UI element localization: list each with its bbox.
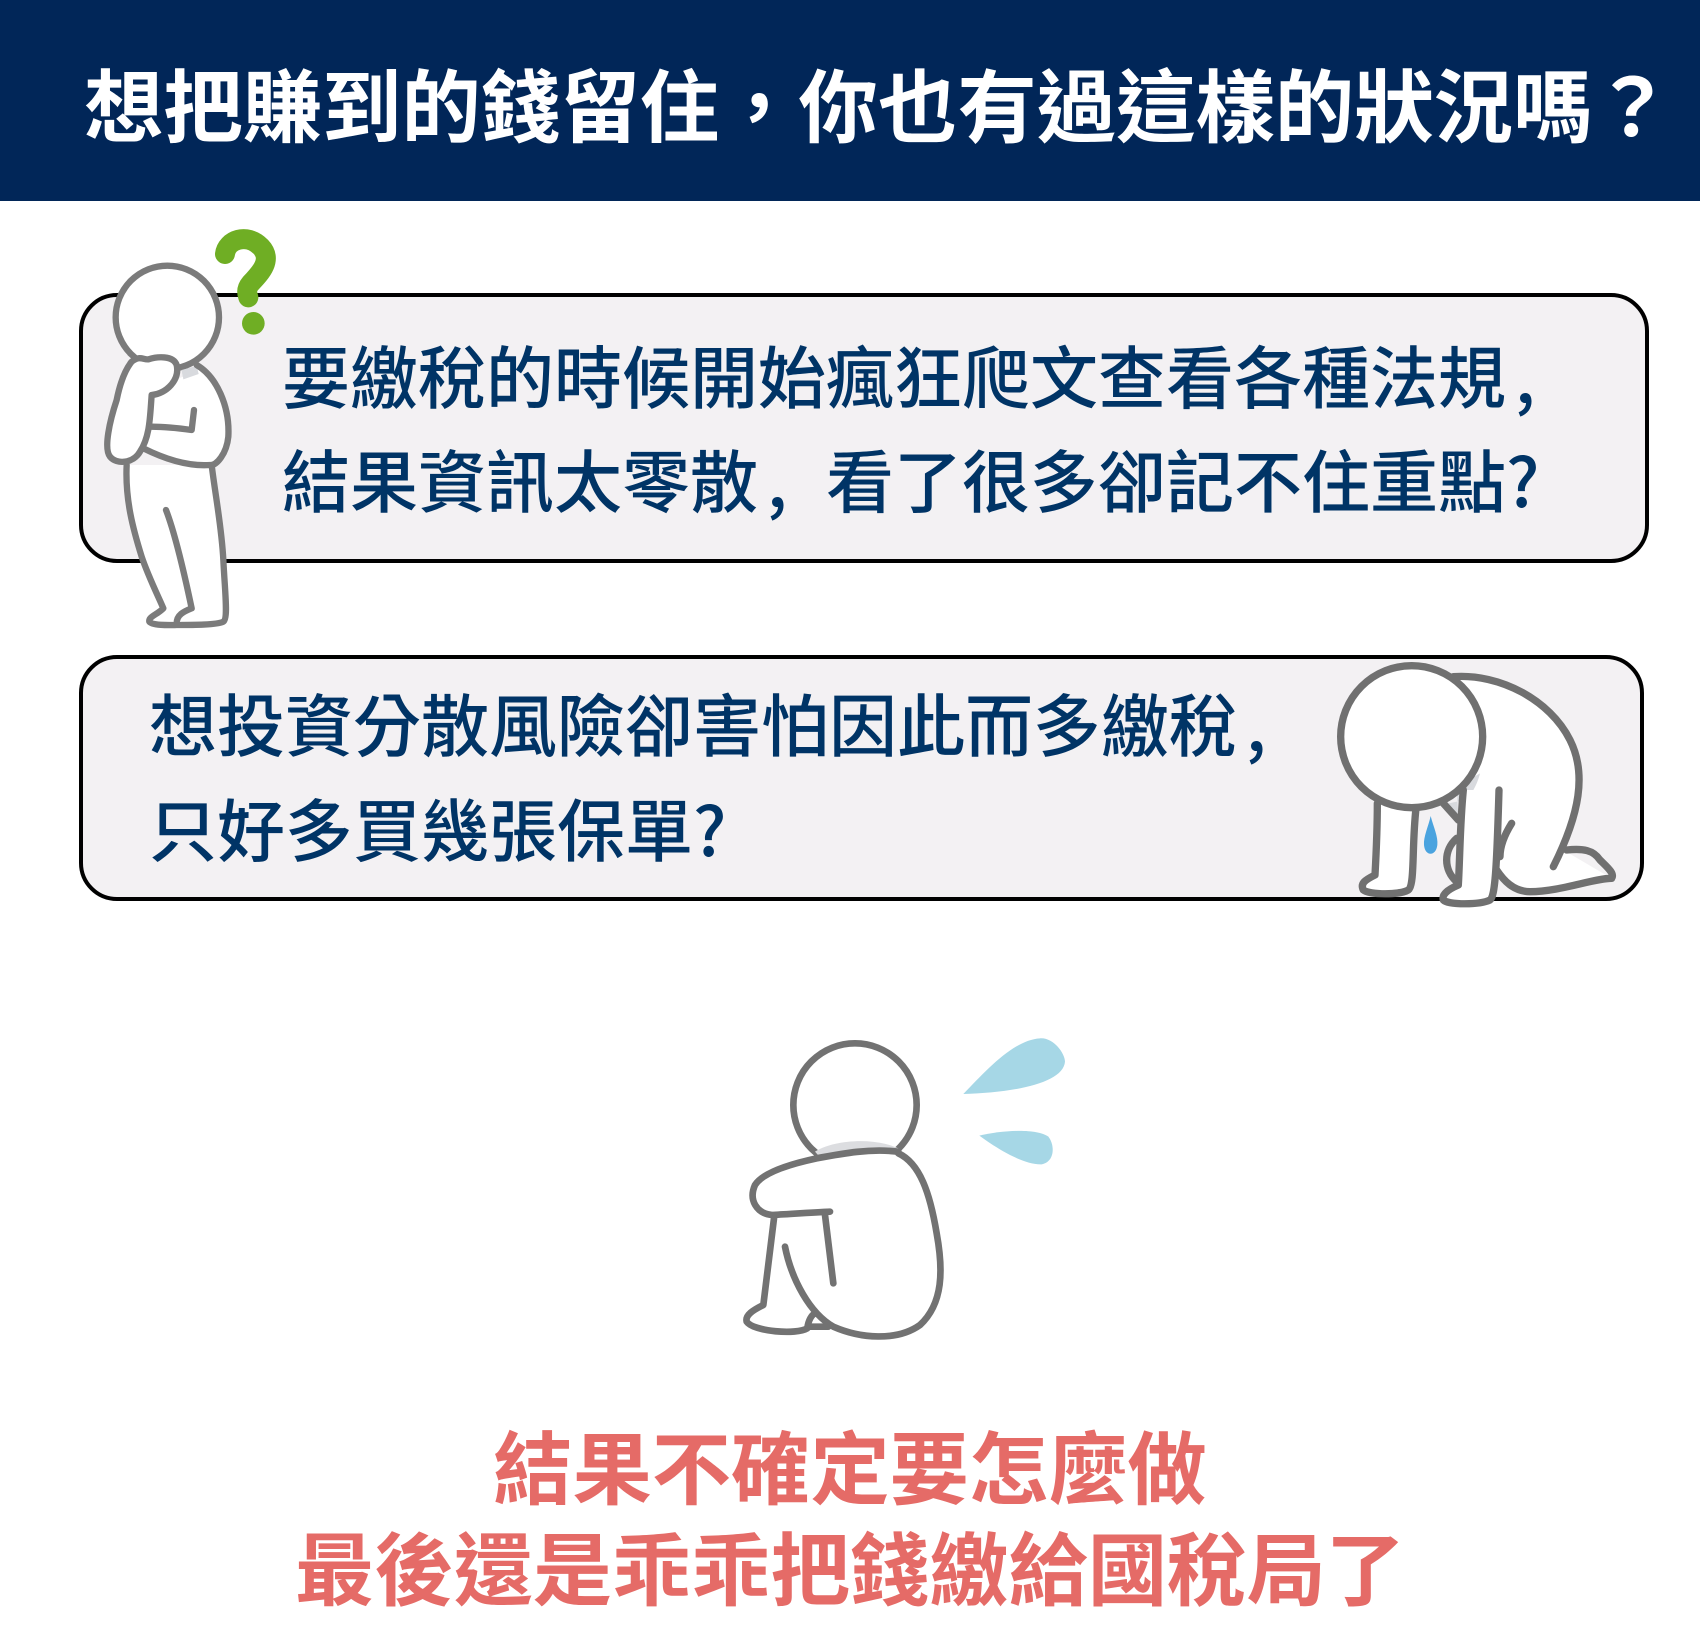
panel: second question <box>79 655 1644 901</box>
text: buy insurance: 只好多買幾張保單? <box>149 777 726 876</box>
conclusion line 2: 最後還是乖乖把錢繳給國稅局了 <box>295 1507 1405 1622</box>
panel background <box>79 293 1649 563</box>
text: diversify investment: 想投資分散風險卻害怕因此而多繳稅 <box>149 672 1237 771</box>
title: 想把賺到的錢留住，你也有過這樣的狀況嗎？ <box>84 44 1672 159</box>
text: tax law research: , <box>1515 324 1535 423</box>
conclusion line 1: 結果不確定要怎麼做 <box>493 1406 1207 1521</box>
text: scattered information: 結果資訊太零散 看了很多卻記不住重點? <box>282 428 1539 527</box>
header band <box>0 0 1700 201</box>
text: tax law research: 要繳稅的時候開始瘋狂爬文查看各種法規 <box>282 324 1506 423</box>
text: diversify investment: , <box>1246 672 1266 771</box>
panel background <box>79 655 1644 901</box>
panel: first question <box>79 293 1649 563</box>
text: scattered information: , <box>767 428 787 527</box>
